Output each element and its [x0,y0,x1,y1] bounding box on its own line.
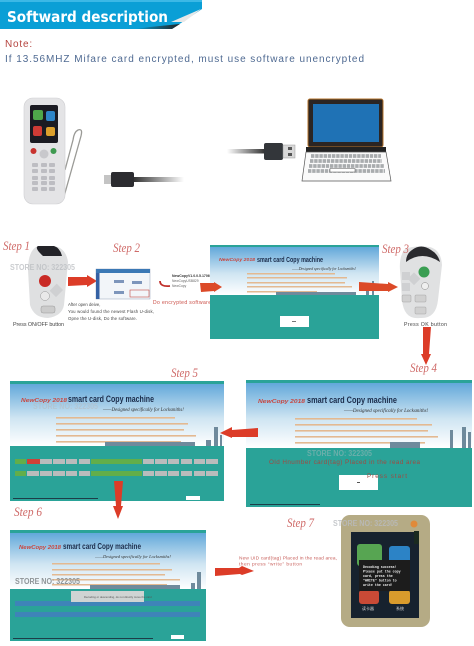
file list: NewCopyV1.0.0.5.17060 [172,274,212,278]
arrow: step 5 to step 6 [113,481,123,519]
watermark: STORE NO: 322305 [15,577,80,586]
screen: step 4 press start: STORE NO: 322305 [307,449,372,458]
file explorer screenshot [96,269,150,299]
icon: device screen photo: STORE NO: 322305 [333,519,398,528]
step 3 label: Step 3 [382,241,409,256]
step 4 label: Step 4 [410,360,437,375]
icon: device screen photo: Decoding success! [363,565,397,569]
icon: device screen photo: Please put the copy [363,570,401,574]
sector row 1 [15,459,218,464]
step 2 label: Step 2 [113,240,140,255]
icon: micro USB cable [104,172,184,187]
sector row 2 [15,471,218,476]
caption: write button [239,556,337,568]
icon: device screen photo [333,515,430,627]
screen: software start window: smart card Copy machine [257,257,323,264]
watermark: STORE NO: 322305 [10,263,75,272]
step 5 label: Step 5 [171,365,198,380]
screen: step 5 reading [10,381,224,501]
caption: press OK: Press OK button [404,322,447,328]
file list: NewCopy [172,284,187,288]
icon: device close-up OK button [400,246,442,318]
screen: step 5 reading: STORE NO: 322305 [33,402,98,411]
icon: device screen photo: card, press the [363,574,393,578]
screen: step 6 decoding: NewCopy 2018 [19,545,61,551]
screen: step 4 press start: ——Designed specifically for Locksmiths! [343,409,429,414]
instructions text: After open deive, [68,302,100,307]
screen: step 4 press start: Old Hnumber card(tag) Placed in the read area [269,459,420,466]
step 7 label: Step 7 [287,515,314,530]
note text: If 13.56MHZ Mifare card encrypted, must use software unencrypted [5,54,364,65]
screen: step 5 reading: ——Designed specifically for Locksmiths! [102,408,184,413]
screen: step 4 press start: Press start [367,473,407,480]
screen: software start window [210,245,379,339]
screen: software start window: ——Designed specifically for Locksmiths! [291,267,357,271]
screen: step 6 decoding: smart card Copy machine [63,541,141,551]
arrow: screen to step 3 [359,282,398,292]
arrow: step 1 to step 2 [68,275,97,287]
step 1 label: Step 1 [3,238,30,253]
caption: press on/off: Press ON/OFF button [13,322,64,328]
screen: step 6 decoding: ——Designed specifically for Locksmiths! [94,554,171,559]
arrow: step 4 to step 5 [220,427,258,438]
screen: step 6 decoding [10,530,206,641]
icon: USB-A cable [227,143,295,160]
icon: device screen photo: "WRITE" button to [363,578,397,582]
screen: step 4 press start: smart card Copy machine [307,395,397,405]
screen: step 6 decoding: Decoding or descending, do not directly move the card [84,595,152,599]
caption: write button: then press “write” button [239,562,302,568]
file list [160,274,212,288]
title banner [0,0,202,29]
icon: device screen photo: 读卡器 [362,605,374,611]
arrow: step 2 to screen [200,282,222,292]
screen: software start window: NewCopy 2018 [219,257,256,262]
icon: device screen photo: write the card! [363,583,393,587]
step 6 label: Step 6 [14,504,42,519]
instructions text: You would found the newest Flash U-disk, [68,309,154,314]
screen: step 4 press start [246,380,472,507]
screen: step 5 reading: NewCopy 2018 [21,398,68,404]
icon: device close-up power button [28,246,68,318]
file list: NewCopyUSB829 [172,279,199,283]
note label: Note: [5,39,33,50]
screen: step 5 reading: smart card Copy machine [68,394,154,404]
caption: write button: New UID card(tag) Placed in the read area, [239,556,337,562]
instructions text [68,302,154,321]
title banner: Softward description [7,8,168,26]
icon: handheld copier device [24,98,82,204]
arrow: step 6 to step 7 [215,566,254,576]
caption: do encrypted software: Do encrypted software [153,300,211,306]
arrow: step 3 to step 4 [421,327,431,365]
icon: device screen photo: 系统 [396,605,404,611]
instructions text: Opne the U-disk, Do the software. [68,316,137,321]
screen: step 4 press start: NewCopy 2018 [258,399,306,405]
icon: laptop [302,99,391,181]
